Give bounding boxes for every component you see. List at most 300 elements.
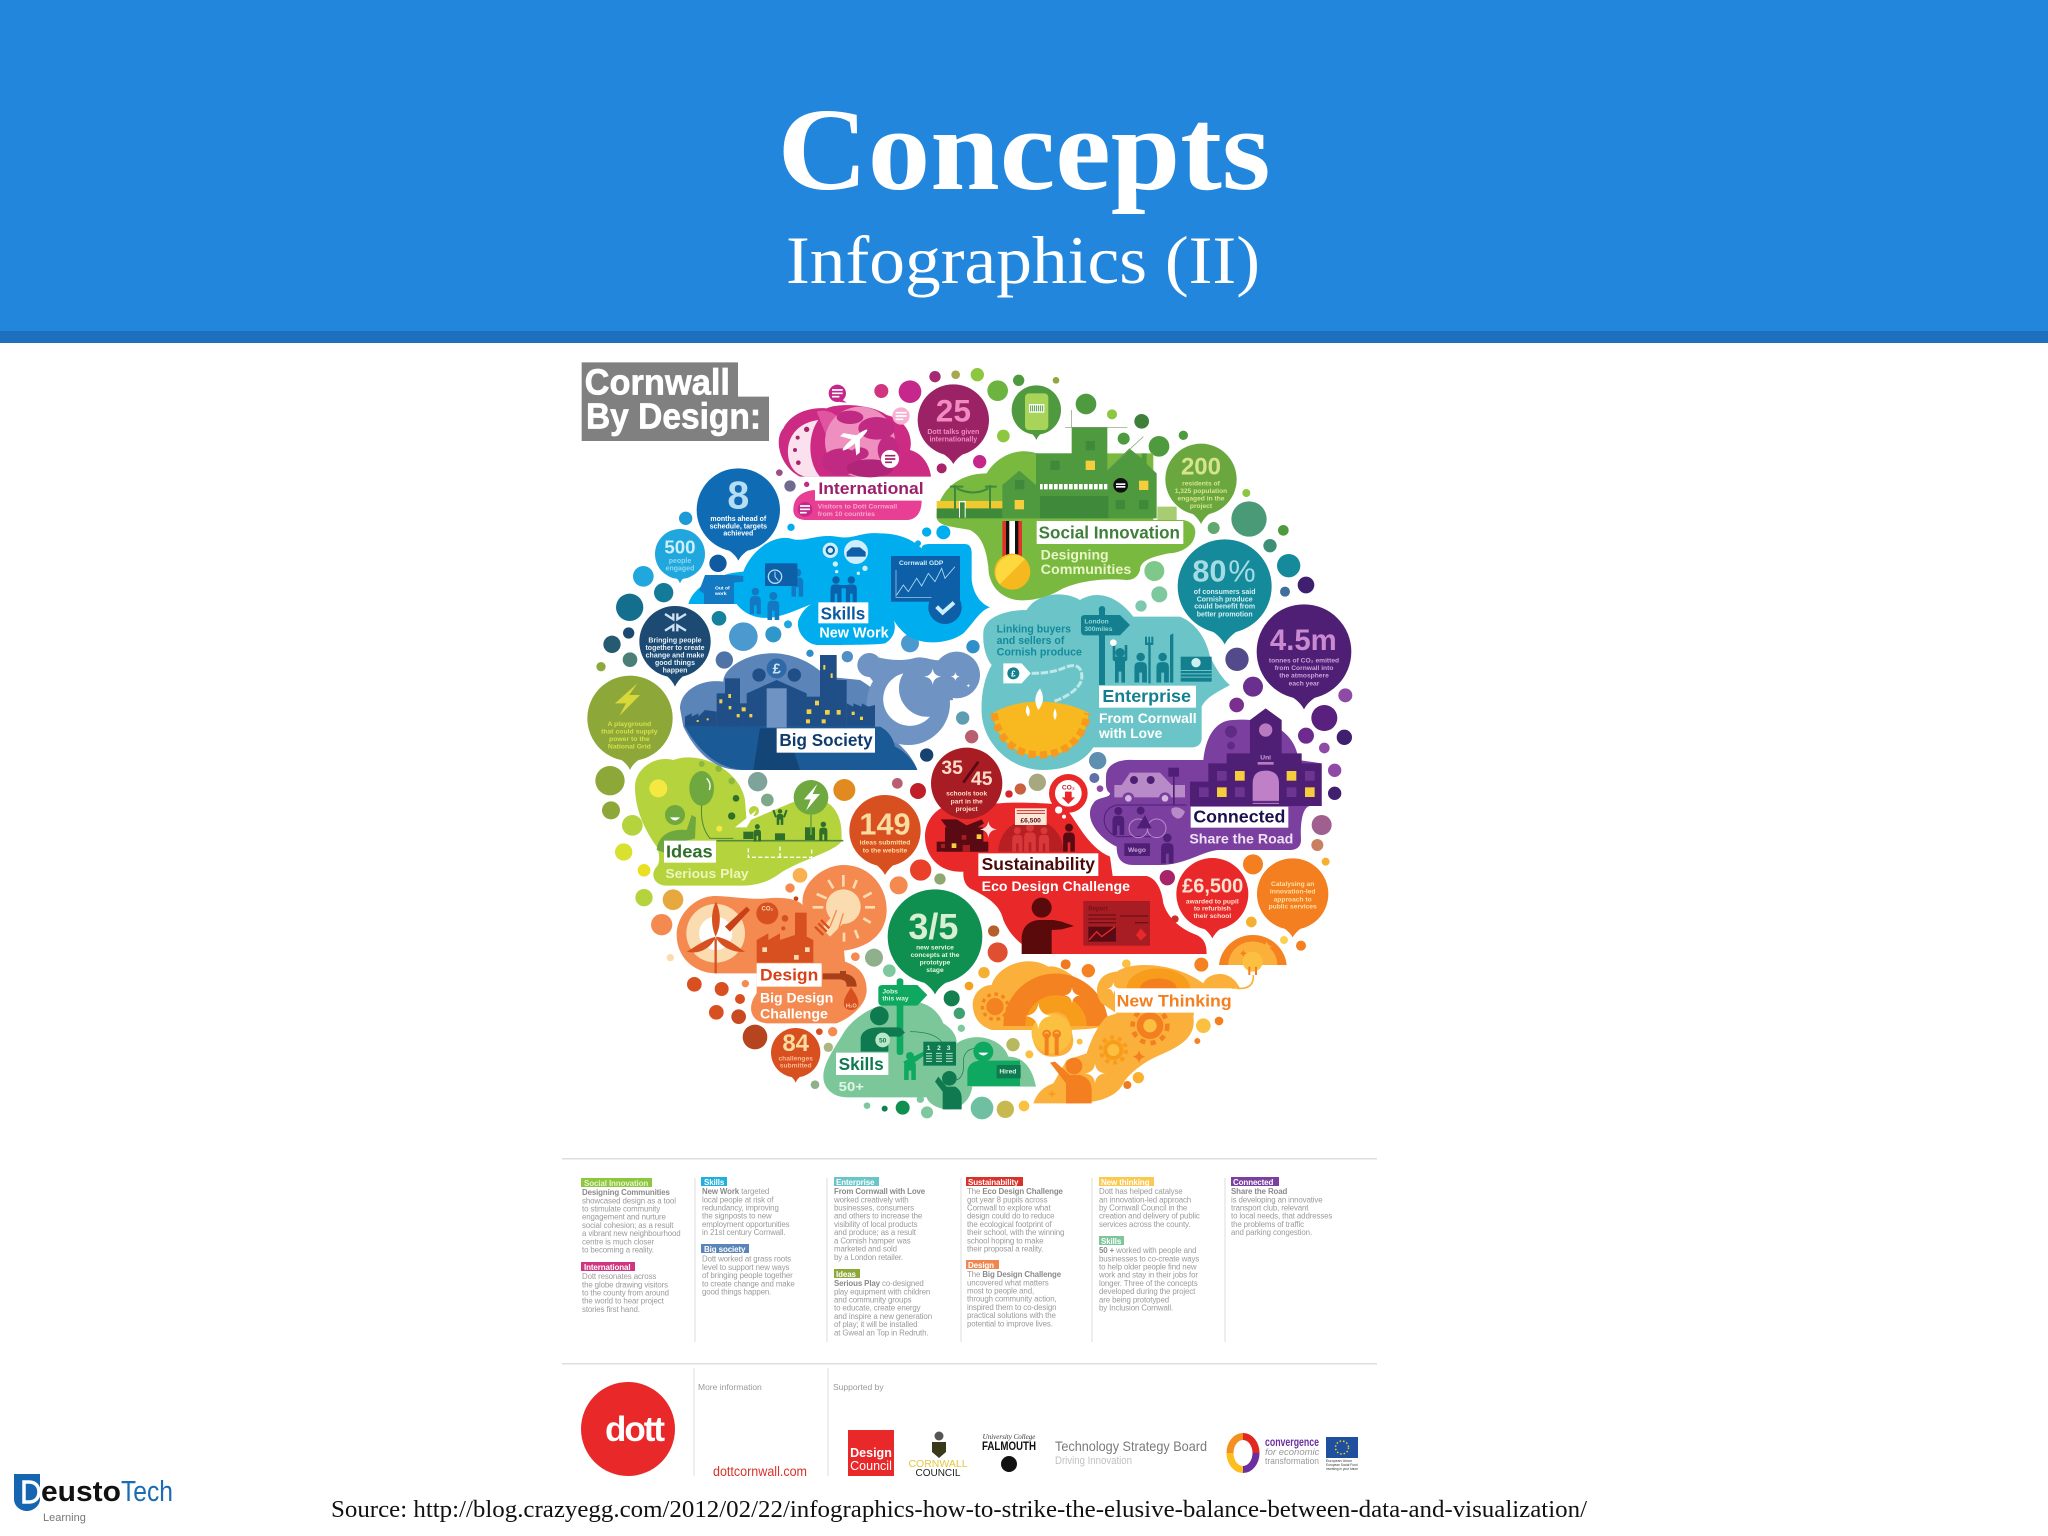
text column 5: New thinking and Skills: Dott has helped catalyse [1099,1187,1183,1196]
figure: waving person [657,805,696,853]
text column 5: New thinking and Skills: an innovation-led approach [1099,1195,1191,1204]
subtitle: Infographics (II) [786,222,1260,298]
label: Sustainability: Sustainability [982,854,1095,874]
stat bubble: catalysing [1257,858,1328,937]
figures with cutlery [1113,633,1173,683]
figures: walker, cyclist, Wego [1104,805,1187,863]
text column 3: Enterprise and Ideas: play equipment with children [834,1287,930,1296]
group with cheque [998,808,1063,852]
text column 3: Enterprise and Ideas: to educate, create energy [834,1304,921,1313]
text column 4: Sustainability and Design: their proposal a reality. [967,1245,1043,1254]
text column 1: Social Innovation and International: showcased design as a tool [582,1196,676,1205]
stat bubble: national grid playground: A playground [607,721,651,728]
panel: New Thinking [973,935,1287,1103]
heading: International [818,479,924,498]
caption pill: Visitors to Dott Cornwall [818,504,897,511]
signpost: jobs this way: Jobs [882,988,898,995]
figures: learners [750,569,803,620]
text column 1: Social Innovation and International: International [584,1263,630,1272]
figure with 50 badge: 50 [879,1038,887,1045]
text column 5: New thinking and Skills: creation and delivery of public [1099,1212,1200,1221]
stat bubble: 4.5m tonnes: each year [1289,680,1320,687]
stat bubble: 84 challenges [771,1028,820,1083]
panel: Connected [1090,708,1322,865]
logo: DeustoTech Learning: eusto [41,1476,121,1508]
stat bubble: bringing people together: happen [663,668,687,675]
panel: Social Innovation: Designing [1041,546,1109,562]
text column 2: Skills and Big society: to create change and make [702,1279,795,1288]
logo: DeustoTech Learning: Tech [121,1476,173,1508]
panel: Skills 50+ [823,978,1036,1109]
panel: Sustainability [925,774,1207,954]
stat bubble: 8 months [697,468,780,561]
tap and H2O drop [823,971,858,1010]
stat bubble: 200 residents: 200 [1181,453,1221,480]
panel: Enterprise: Linking buyers [997,624,1071,636]
stat bubble: 4.5m tonnes: 4.5m [1270,624,1337,657]
text column 4: Sustainability and Design: school hoping to make [967,1236,1044,1245]
text column 4: Sustainability and Design: through community action, [967,1295,1057,1304]
text column 1: Social Innovation and International: social cohesion; as a result [582,1221,674,1230]
stat bubble: bringing people together: together to create [645,645,705,652]
panel: International [779,385,931,520]
windows [1015,441,1148,518]
convergence text: for economic [1265,1447,1320,1458]
label: Connected: Connected [1193,807,1285,827]
text column 3: Enterprise and Ideas [833,1177,932,1337]
stat bubble: 84 challenges: 84 [782,1030,810,1057]
text column 1: Social Innovation and International: stories first hand. [582,1305,640,1314]
ground and figures [717,809,843,842]
text column 2: Skills and Big society: Dott worked at grass roots [702,1255,791,1264]
text column 4: Sustainability and Design: potential to improve lives. [967,1319,1053,1328]
label: Skills: Skills [839,1054,884,1074]
logo: University College Falmouth [982,1433,1036,1472]
bubble dots: upper left [596,368,1010,762]
logo: European Union flag: European Social Fund [1326,1463,1358,1467]
text column 3: Enterprise and Ideas: and produce; as a result [834,1228,917,1237]
stat bubble: 80 percent: better promotion [1197,611,1253,618]
panel: Ideas: Serious Play [665,866,749,881]
stat bubble: 200 residents: 1,325 population [1175,488,1227,495]
report: Report [1088,907,1108,913]
panel: Skills New Work [688,533,990,645]
text column 3: Enterprise and Ideas: and others to increase the [834,1212,923,1221]
stat bubble: 149 ideas: to the website [863,847,907,854]
stat bubble: 4.5m tonnes [1257,604,1351,709]
text column 3: Enterprise and Ideas: and inspire a new generation [834,1312,932,1321]
text column 4: Sustainability and Design: Sustainability [968,1178,1019,1187]
stat bubble: 25 talks: 25 [936,393,971,429]
text column 6: Connected: to local needs, that addresses [1231,1212,1332,1221]
group with cheque: £6,500 [1020,817,1041,824]
icon bubble: CO2: CO₂ [1062,784,1075,791]
icon: plane [835,420,875,460]
text column 5: New thinking and Skills: 50 + worked with people and [1099,1246,1196,1255]
text column 3: Enterprise and Ideas: a Cornish hamper was [834,1236,911,1245]
text column 3: Enterprise and Ideas: worked creatively with [833,1195,909,1204]
panel: Skills New Work: Out of [715,585,730,591]
text column 6: Connected [1231,1177,1332,1237]
stat bubble: 8 months: achieved [723,531,753,538]
stat bubble: 200 residents: residents of [1182,480,1221,487]
text column 4: Sustainability and Design: their school, with the winning [967,1228,1064,1237]
logo: DeustoTech Learning: Learning [43,1512,86,1524]
stat bubble: catalysing: Catalysing an [1271,881,1314,888]
text column 3: Enterprise and Ideas: and community groups [834,1296,912,1304]
stat bubble: 80 percent: Cornish produce [1197,596,1253,603]
stat bubble: 149 ideas: 149 [859,807,911,841]
stat bubble: 200 residents [1165,444,1237,524]
stat bubble: 80 percent: % [1228,555,1256,589]
text column 1: Social Innovation and International: to becoming a reality. [582,1246,654,1255]
report [1083,901,1150,946]
panel: Design: Big Design [760,989,833,1005]
logo: DeustoTech Learning [14,1474,173,1524]
text column 1: Social Innovation and International: the world to hear project [582,1297,665,1306]
tap and H2O drop: H₂O [846,1003,857,1009]
panel: Skills 50+: 50+ [839,1079,864,1094]
panel: Enterprise: with Love [1098,725,1163,741]
text column 2: Skills and Big society: of bringing people together [702,1271,793,1280]
text column 6: Connected: is developing an innovative [1231,1195,1323,1204]
text column 6: Connected: Share the Road [1231,1187,1287,1196]
text column 3: Enterprise and Ideas: Serious Play co-designed [834,1279,924,1288]
caption pill: from 10 countries [818,511,875,518]
stat bubble: 35 of 45 schools: part in the [951,798,983,805]
text column 5: New thinking and Skills [1098,1177,1200,1313]
stat bubble: 6,500 pounds: to refurbish [1194,906,1231,913]
text column 3: Enterprise and Ideas: From Cornwall with Love [834,1187,926,1196]
text column 5: New thinking and Skills: New thinking [1101,1178,1150,1187]
stat bubble: 25 talks: internationally [929,437,977,444]
left rainbow cloud [973,961,1108,1057]
stat bubble: national grid playground: National Grid [608,743,651,750]
label: Ideas: Ideas [666,841,713,861]
text column 5: New thinking and Skills: to help older people find new [1099,1262,1197,1272]
icon: car [1114,768,1185,805]
bubble dots: lower right [922,790,1332,1119]
text column 4: Sustainability and Design [966,1177,1064,1328]
stat bubble: 35 of 45 schools [931,748,1002,819]
stat bubble: bringing people together [639,606,711,687]
poster heading: Cornwall By Design: By Design: [586,395,761,436]
stat bubble: 500 people: engaged [666,566,694,573]
stat bubble: 84 challenges: challenges [778,1056,813,1063]
signpost: London [1084,619,1109,626]
stat bubble: catalysing: approach to [1274,896,1312,903]
pasty [993,688,1088,756]
city skyline [685,655,875,727]
stat bubble: 500 people [655,529,705,583]
panel: Skills New Work: New Work [819,626,889,642]
poster heading: Cornwall By Design: Cornwall [585,361,730,402]
more information [694,1368,807,1479]
caption pill [793,490,922,520]
text column 2: Skills and Big society: the signposts to new [702,1212,772,1221]
stat bubble: 8 months: schedule, targets [710,523,767,530]
text column 2: Skills and Big society: in 21st century Cornwall. [702,1228,785,1237]
logo: University College Falmouth: University College [983,1433,1035,1441]
text column 3: Enterprise and Ideas: visibility of local products [834,1220,918,1229]
text column 5: New thinking and Skills: by Cornwall Council in the [1099,1204,1188,1212]
text column 2: Skills and Big society: New Work targeted [702,1187,769,1196]
text column 5: New thinking and Skills: services across the county. [1099,1220,1190,1229]
text column 1: Social Innovation and International [581,1178,681,1314]
text column 3: Enterprise and Ideas: Ideas [836,1270,857,1279]
chart: Cornwall GDP [891,556,962,624]
logo: Cornwall Council: CORNWALL [908,1458,968,1470]
train [937,485,1002,518]
figures: walker, cyclist, Wego: Wego [1128,847,1146,854]
icon: medal [994,521,1030,590]
panel: Design: Challenge [760,1005,828,1021]
figure: person reaching [1050,1058,1092,1103]
text column 2: Skills and Big society: local people at risk of [702,1195,774,1204]
text column 4: Sustainability and Design: practical solutions with the [967,1311,1056,1320]
panel: Skills New Work: work [714,591,727,597]
logo: Cornwall Council [908,1432,968,1479]
figure with 50 badge [861,1007,905,1052]
stat bubble: 6,500 pounds [1176,858,1248,938]
text column 1: Social Innovation and International: Dott resonates across [582,1272,656,1281]
stat bubble: 500 people: 500 [664,536,696,557]
text column 4: Sustainability and Design: design could do to reduce [967,1212,1055,1221]
text column 1: Social Innovation and International: to the county from around [582,1288,669,1298]
stat bubble: 8 months: months ahead of [710,516,767,523]
supported by: Supported by [833,1382,884,1392]
figure: hired person: Hired [999,1068,1016,1075]
text column 4: Sustainability and Design: Cornwall to explore what [967,1204,1051,1212]
text column 1: Social Innovation and International: the globe drawing visitors [582,1280,668,1289]
text column 2: Skills and Big society: good things happen. [702,1288,771,1297]
stat bubble: 200 residents: project [1190,503,1213,510]
text column 4: Sustainability and Design: Design [968,1261,994,1270]
text column 6: Connected: transport club, relevant [1231,1204,1309,1212]
text column 4: Sustainability and Design: The Big Design Challenge [967,1270,1062,1279]
text column 1: Social Innovation and International: to stimulate community [582,1204,660,1214]
text column 3: Enterprise and Ideas: businesses, consumers [834,1204,914,1212]
panel: Design [677,865,887,1023]
text column 6: Connected: the problems of traffic [1231,1220,1304,1229]
text column 4: Sustainability and Design: the ecological footprint of [967,1220,1052,1229]
logo: University College Falmouth: FALMOUTH [982,1439,1036,1453]
icon: pound coin with heads: £ [773,662,781,678]
logo: Technology Strategy Board: Driving Innovation [1055,1455,1132,1467]
stat bubble: 80 percent [1178,539,1272,644]
stat bubble: 3 of 5 [888,889,982,994]
stat bubble: 3 of 5: 3/5 [908,906,958,947]
text column 1: Social Innovation and International: a vibrant new neighbourhood [582,1229,681,1238]
stat bubble: 84 challenges: submitted [780,1063,812,1070]
stat bubble: 35 of 45 schools: schools took [946,791,987,798]
stat bubble: national grid playground [587,676,673,770]
more information: More information [698,1382,762,1392]
stat bubble: 6,500 pounds: awarded to pupil [1186,898,1239,905]
panel: Skills 50+: 2 [937,1045,941,1052]
text column 2: Skills and Big society: employment opportunities [702,1220,790,1229]
text column 6: Connected: Connected [1233,1178,1273,1187]
text column 5: New thinking and Skills: longer. Three of the concepts [1099,1279,1198,1288]
moon cloud [857,652,980,745]
stat bubble: 35 of 45 schools: 35 [941,758,963,779]
stat bubble: 3 of 5: concepts at the [911,952,960,959]
logo: Design Council: Council [850,1459,892,1473]
panel: Enterprise: and sellers of [997,635,1065,647]
stat bubble: 3 of 5: prototype [920,960,951,967]
signpost [1081,606,1130,685]
stat bubble: 4.5m tonnes: tonnes of CO₂ emitted [1269,657,1339,664]
stat bubble: 6,500 pounds: £6,500 [1182,876,1243,898]
logo: European Union flag [1326,1437,1358,1471]
text column 5: New thinking and Skills: businesses to co-create ways [1099,1254,1199,1263]
icon bubble: CO2 [1049,774,1088,819]
logo: Design Council [848,1430,894,1476]
stat bubble: 4.5m tonnes: the atmosphere [1279,673,1329,680]
text column 3: Enterprise and Ideas: at Gweal an Top in Redruth. [834,1328,928,1337]
icon bubble: mobile phone [1012,385,1061,440]
logo: European Union flag: European Union [1326,1459,1352,1463]
text column 1: Social Innovation and International: Designing Communities [582,1188,671,1197]
logo: European Union flag: investing in your future [1326,1467,1358,1471]
stat bubble: 80 percent: of consumers said [1194,589,1256,596]
icons: gear and car [823,540,868,575]
icon: balloon [689,771,733,838]
banknotes [1181,657,1212,682]
stat bubble: 80 percent: 80 [1192,555,1226,589]
stat bubble: national grid playground: that could supply [601,729,658,736]
logo: Technology Strategy Board: Technology Strategy Board [1055,1438,1207,1454]
price tag and chain [1003,663,1082,702]
stat bubble: 4.5m tonnes: from Cornwall into [1275,665,1333,672]
text column 5: New thinking and Skills: are being prototyped [1099,1295,1169,1304]
stat bubble: 35 of 45 schools: project [956,806,979,813]
text column 2: Skills and Big society: Skills [704,1178,725,1187]
logo: dott [581,1382,675,1476]
text column 4: Sustainability and Design: inspired them to co-design [967,1303,1056,1312]
text column 4: Sustainability and Design: uncovered what matters [967,1278,1049,1287]
supported by [828,1368,884,1476]
icon: factory: CO₂ [762,907,773,913]
figure presenting [1022,898,1074,954]
stat bubble: bringing people together: change and make [646,653,704,660]
panel: Enterprise: From Cornwall [1099,710,1197,726]
panel: Skills 50+: 1 [927,1045,931,1052]
icon: chat bubble [829,385,847,403]
dashed circuit [748,847,812,857]
stat bubble: 3 of 5: stage [926,967,944,974]
text column 5: New thinking and Skills: developed during the project [1099,1287,1196,1296]
panel: Social Innovation: Communities [1041,561,1132,577]
convergence text [1265,1437,1320,1467]
label: Big Society: Big Society [779,730,873,750]
small sunrise with bulb [1219,935,1287,988]
text column 3: Enterprise and Ideas: by a London retailer. [834,1253,903,1262]
stat bubble: national grid playground: power to the [609,736,650,743]
stat bubble: catalysing: innovation-led [1270,889,1315,896]
bubble dots: upper right [1005,375,1352,800]
stat bubble: bringing people together: Bringing people [648,637,702,644]
text column 4: Sustainability and Design: got year 8 pupils across [967,1195,1048,1204]
text column 1: Social Innovation and International: Social Innovation [584,1179,648,1188]
text column 2: Skills and Big society: Big society [704,1245,746,1254]
panel: Enterprise: Cornish produce [997,646,1082,658]
panel: Social Innovation [937,410,1195,600]
stat bubble: 500 people: people [669,558,691,565]
figure: waving older person [935,1071,962,1109]
figures: handshake [830,576,857,602]
schoolhouse with book roof [937,819,988,852]
icon: pound coin with heads [752,658,801,682]
buildings [1002,427,1157,518]
logo: Cornwall Council: COUNCIL [915,1468,961,1479]
text column 2: Skills and Big society [701,1177,795,1297]
text column 5: New thinking and Skills: by Inclusion Cornwall. [1099,1304,1173,1313]
panel: Enterprise [982,594,1230,770]
text column 4: Sustainability and Design: most to people and, [967,1286,1034,1296]
stat bubble: 200 residents: engaged in the [1178,495,1225,502]
chart: Cornwall GDP: Cornwall GDP [899,560,944,567]
label: New Thinking: New Thinking [1117,992,1232,1011]
stat bubble: 25 talks [918,384,989,464]
divider above footer [562,1363,1377,1364]
figure: out of work [699,555,743,604]
divider above text columns [562,1158,1377,1160]
stat bubble: 80 percent: could benefit from [1194,604,1255,611]
convergence text: transformation [1265,1456,1319,1467]
panel: Connected: Uni [1260,754,1271,761]
board with clock [765,563,797,586]
text column 5: New thinking and Skills: work and stay in their jobs for [1098,1271,1198,1280]
figure pointing at list [903,1052,925,1080]
figure: hired person [967,1042,1021,1086]
label: Social Innovation: Social Innovation [1039,522,1180,542]
more information: dottcornwall.com [713,1463,807,1479]
panel: Big Society [680,652,980,770]
text column 3: Enterprise and Ideas: marketed and sold [834,1245,897,1254]
icon: wind turbine [686,902,750,973]
text column 2: Skills and Big society: redundancy, improving [702,1204,779,1212]
convergence text: convergence [1265,1437,1319,1449]
signpost: jobs this way: this way [882,996,909,1003]
panel: Ideas [635,757,843,886]
stat bubble: bringing people together: good things [655,660,695,667]
bubble dots: lower left [595,766,946,1118]
text column 1: Social Innovation and International: engagement and nurture [582,1213,667,1222]
panel: Skills 50+: 3 [947,1045,951,1052]
signpost: jobs this way [878,978,927,1055]
panel: Connected: Share the Road [1189,831,1293,847]
text column 3: Enterprise and Ideas: Enterprise [836,1178,875,1187]
text column 6: Connected: and parking congestion. [1231,1228,1312,1237]
stat bubble: catalysing: public services [1269,904,1317,911]
stat bubble: 35 of 45 schools: 45 [971,769,993,790]
icon: factory [756,902,813,963]
text column 5: New thinking and Skills: Skills [1101,1237,1122,1246]
label: Enterprise: Enterprise [1102,686,1191,706]
label: Design: Design [760,966,818,985]
text column 2: Skills and Big society: level to support new ways [702,1263,790,1272]
stat bubble: 3 of 5: new service [916,945,954,952]
logo: Technology Strategy Board [1055,1438,1207,1467]
icon: light bulb [813,875,875,942]
lit windows [697,665,863,723]
source citation: Source: http://blog.crazyegg.com/2012/02/22/infographics-how-to-strike-the-elusive-balance-between-data-and-visualization/ [331,1497,1587,1523]
panel: Sustainability: Eco Design Challenge [982,878,1130,894]
stat bubble: 149 ideas: ideas submitted [860,840,910,847]
signpost: 300miles [1084,626,1113,633]
university building [1190,708,1322,806]
